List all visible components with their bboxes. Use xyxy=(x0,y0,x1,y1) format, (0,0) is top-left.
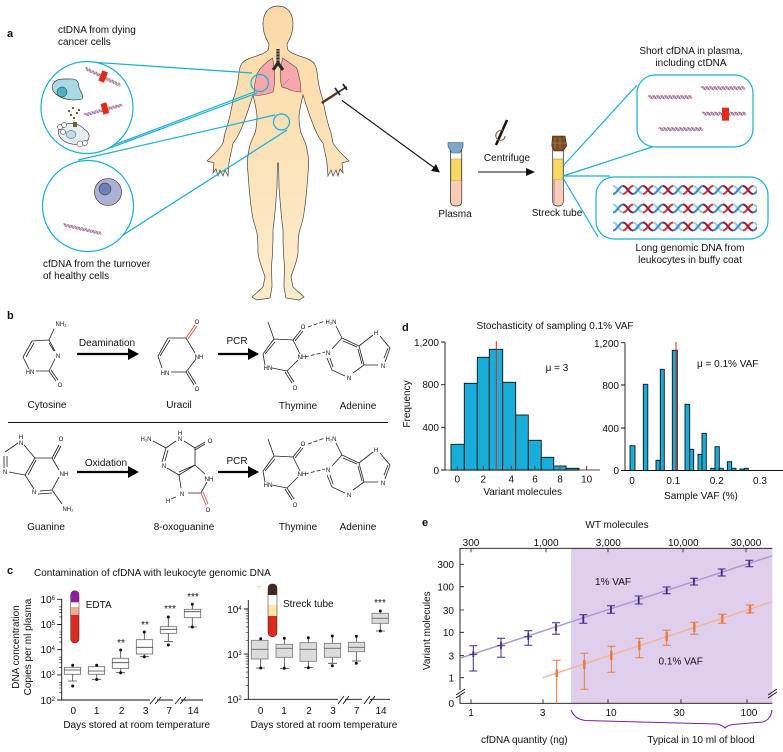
icon: Streck tube xyxy=(268,584,277,637)
top axis tick labels xyxy=(463,538,762,549)
thymine adenine pair bottom: O xyxy=(293,503,298,509)
icon: healthy nucleus xyxy=(99,183,111,195)
guanine structure: N xyxy=(32,490,36,496)
x-axis tick labels: 7 xyxy=(167,706,173,717)
top axis tick labels: 1,000 xyxy=(533,538,559,549)
axis labels: 1,200 xyxy=(594,339,619,350)
left axis tick labels: 300 xyxy=(437,560,454,571)
axis labels: 0.2 xyxy=(710,476,724,487)
8-oxoguanine structure: H xyxy=(178,431,182,437)
label 8-oxoguanine: 8-oxoguanine xyxy=(154,522,215,533)
bottom axis tick labels: 3 xyxy=(540,708,546,719)
left axis tick labels: 0 xyxy=(448,699,454,710)
8-oxoguanine structure xyxy=(140,431,213,514)
y-axis tick labels: 2 xyxy=(52,697,56,703)
significance stars: ** xyxy=(117,638,125,649)
icon: apoptotic blebs xyxy=(58,122,88,147)
top axis tick labels: 30,000 xyxy=(731,538,762,549)
left axis tick labels: 10 xyxy=(443,628,454,639)
annotation mu: μ = 3 xyxy=(546,363,569,374)
thymine adenine pair top: N xyxy=(347,376,351,382)
cytosine structure xyxy=(23,322,67,389)
y-axis subtitle: Copies per ml plasma xyxy=(23,598,34,695)
bottom axis tick labels: 1 xyxy=(468,708,474,719)
label guanine: Guanine xyxy=(27,522,65,533)
y-axis tick labels: 10 xyxy=(41,595,52,606)
axis labels: 10 xyxy=(581,474,593,486)
significance stars: *** xyxy=(164,604,176,615)
x-axis title: Variant molecules xyxy=(483,487,562,498)
box: short cfDNA xyxy=(637,75,753,147)
axis labels: 1,200 xyxy=(414,338,439,349)
thymine adenine pair top: N xyxy=(381,364,385,370)
caption long genomic DNA: leukocytes in buffy coat xyxy=(638,255,742,266)
x-axis tick labels: 7 xyxy=(354,706,360,717)
bottom axis tick labels: 10 xyxy=(605,708,617,719)
y-axis tick labels: 10 xyxy=(41,620,52,631)
8-oxoguanine structure: O xyxy=(206,508,211,514)
label deamination: Deamination xyxy=(79,338,135,349)
histogram: sample VAF xyxy=(594,339,783,502)
axis labels: 400 xyxy=(422,423,439,434)
label streck tube: Streck tube xyxy=(532,208,583,219)
panel label b: b xyxy=(7,310,14,322)
cytosine structure: NH₂ xyxy=(56,322,67,328)
panel label d: d xyxy=(402,322,409,334)
axis labels: 800 xyxy=(602,381,619,392)
y-axis tick labels: 10 xyxy=(41,696,52,707)
axis labels: 6 xyxy=(532,474,538,486)
y-axis tick labels: 10 xyxy=(227,650,238,661)
histogram: variant molecules xyxy=(402,338,600,498)
callout lines to boxes xyxy=(563,85,652,237)
lungs and trachea xyxy=(254,49,301,95)
panel d title: Stochasticity of sampling 0.1% VAF xyxy=(476,321,634,332)
label uracil: Uracil xyxy=(166,400,192,411)
y-axis title: DNA concentration xyxy=(11,605,22,689)
top axis tick labels: 10,000 xyxy=(668,538,699,549)
x-axis tick labels: 1 xyxy=(281,706,287,717)
axis labels: 0.1 xyxy=(666,476,681,487)
1% VAF fit line xyxy=(460,556,772,658)
axis labels: 0 xyxy=(455,474,461,486)
significance stars: *** xyxy=(187,592,199,603)
PCR arrow top xyxy=(218,348,259,360)
panel c: leukocyte contamination box plots xyxy=(7,517,777,746)
8-oxoguanine structure: N xyxy=(162,464,166,470)
thymine adenine pair bottom: N xyxy=(347,493,351,499)
icon: EDTA tube xyxy=(71,591,79,643)
1% VAF error bars xyxy=(469,560,753,671)
8-oxoguanine structure: N xyxy=(180,492,184,498)
x-axis tick labels: 0 xyxy=(258,706,264,717)
ctDNA fragment with mutation xyxy=(84,102,123,117)
panel label e: e xyxy=(422,517,428,529)
y-axis title: Frequency xyxy=(402,380,413,428)
human body xyxy=(207,6,349,300)
guanine structure xyxy=(3,435,74,513)
x-axis tick labels: 14 xyxy=(375,706,387,717)
icon: healthy cell xyxy=(94,178,122,206)
callout lines xyxy=(78,62,287,237)
arrow to plasma tube xyxy=(342,100,440,172)
axis labels: 800 xyxy=(422,380,439,391)
plot: variant molecules xyxy=(456,548,777,703)
short DNA fragments xyxy=(648,86,746,131)
thymine adenine pair bottom xyxy=(263,437,390,509)
left axis tick labels: 3 xyxy=(448,652,454,662)
label PCR bottom: PCR xyxy=(226,456,248,467)
caption short cfDNA: Short cfDNA in plasma, xyxy=(639,46,743,57)
icon: nucleus xyxy=(57,87,67,97)
x-axis tick labels: 3 xyxy=(330,706,336,717)
guanine structure: NH₂ xyxy=(62,507,74,513)
uracil structure: NH xyxy=(195,355,203,361)
axis labels: 8 xyxy=(557,474,563,486)
deamination arrow xyxy=(77,348,139,360)
x-axis tick labels xyxy=(258,706,387,717)
panel b: DNA damage chemistry xyxy=(3,310,390,533)
thymine adenine pair bottom: HN xyxy=(264,483,272,489)
gut callout ring xyxy=(274,114,290,130)
8-oxoguanine structure: O xyxy=(208,439,213,445)
thymine adenine pair top xyxy=(263,320,390,392)
uracil structure: HN xyxy=(161,371,169,377)
uracil structure xyxy=(158,320,203,393)
lung callout ring xyxy=(251,74,268,92)
cytosine structure: O xyxy=(58,383,63,389)
y-axis tick labels: 4 xyxy=(52,646,56,652)
plasma tube xyxy=(448,142,463,206)
y-axis tick labels: 5 xyxy=(52,621,56,627)
faint stray stars: ** xyxy=(257,586,262,592)
thymine adenine pair top: H xyxy=(374,331,378,337)
bottom axis tick labels: 100 xyxy=(741,708,758,719)
x-axis tick labels xyxy=(71,706,199,717)
thymine adenine pair bottom: H xyxy=(374,448,378,454)
panel d: stochasticity histograms xyxy=(402,321,783,502)
bottom axis tick labels: 30 xyxy=(674,708,685,719)
thymine adenine pair bottom: N xyxy=(381,481,385,487)
shaded typical range xyxy=(571,548,772,703)
0.1% VAF fit line xyxy=(543,602,772,678)
y-axis tick labels: 2 xyxy=(238,696,242,702)
top axis tick labels: 300 xyxy=(463,538,480,549)
label typical in blood: Typical in 10 ml of blood xyxy=(647,735,755,746)
centrifuge arrow xyxy=(478,168,535,176)
cytosine structure: N xyxy=(56,354,60,360)
significance stars: *** xyxy=(374,598,386,609)
x-axis title: Days stored at room temperature xyxy=(63,720,210,731)
axis labels: 0 xyxy=(613,466,619,477)
label thymine top: Thymine xyxy=(279,401,318,412)
caption ctDNA: ctDNA from dying xyxy=(58,25,136,36)
label oxidation: Oxidation xyxy=(85,458,127,469)
caption cfDNA: of healthy cells xyxy=(43,271,109,282)
guanine structure: O xyxy=(59,437,64,443)
y-axis tick labels: 10 xyxy=(41,645,52,656)
ctDNA fragment with mutation xyxy=(84,67,121,87)
thymine adenine pair bottom: O xyxy=(301,442,306,448)
x-axis tick labels: 2 xyxy=(306,706,312,717)
y-axis tick labels xyxy=(227,605,242,706)
cfDNA fragment xyxy=(63,223,102,235)
label cfDNA quantity: cfDNA quantity (ng) xyxy=(481,735,568,746)
top axis title: WT molecules xyxy=(585,520,649,531)
icon: cancer cell xyxy=(52,79,83,100)
8-oxoguanine structure: NH xyxy=(205,477,213,483)
zoom circle: dying cancer cells xyxy=(41,62,133,154)
y-axis tick labels: 10 xyxy=(41,670,52,681)
thymine adenine pair top: O xyxy=(293,386,298,392)
label adenine bottom: Adenine xyxy=(340,522,377,533)
icon: apoptotic nucleus xyxy=(66,130,76,138)
caption long genomic DNA: Long genomic DNA from xyxy=(636,243,744,254)
purple brace xyxy=(571,710,772,728)
zoom circle: healthy cells xyxy=(42,160,134,252)
label Streck tube: Streck tube xyxy=(283,599,334,610)
axis labels: 4 xyxy=(509,474,515,486)
uracil structure: O xyxy=(195,320,200,326)
axis labels: 400 xyxy=(602,424,619,435)
x-axis tick labels: 3 xyxy=(143,706,149,717)
x-axis tick labels: 1 xyxy=(94,706,100,717)
significance stars: ** xyxy=(141,620,149,631)
panel e: variant molecules vs cfDNA quantity xyxy=(422,517,777,746)
y-axis tick labels: 6 xyxy=(52,596,56,602)
0.1% VAF error bars xyxy=(553,605,754,703)
thymine adenine pair top: NH xyxy=(298,355,306,361)
y-axis tick labels: 10 xyxy=(227,605,238,616)
icon: syringe xyxy=(322,84,347,103)
guanine structure: H xyxy=(19,435,23,441)
thymine adenine pair bottom: N xyxy=(326,468,330,474)
x-axis tick labels: 0 xyxy=(71,706,77,717)
label thymine bottom: Thymine xyxy=(279,522,318,533)
y-axis tick labels: 4 xyxy=(238,606,242,612)
axis labels: 0 xyxy=(629,476,635,487)
cytosine structure: HN xyxy=(26,370,34,376)
thymine adenine pair bottom: H₂N xyxy=(326,437,336,443)
axis labels: 0 xyxy=(433,466,439,477)
label plasma: Plasma xyxy=(438,209,472,220)
caption cfDNA: cfDNA from the turnover xyxy=(43,259,150,270)
box plot: EDTA xyxy=(41,591,210,731)
uracil structure: O xyxy=(195,387,200,393)
panel c title: Contamination of cfDNA with leukocyte genomic DNA xyxy=(34,568,271,579)
oxidation arrow xyxy=(77,466,139,478)
axis labels: 0.3 xyxy=(753,476,767,487)
x-axis title: Sample VAF (%) xyxy=(664,491,738,502)
caption short cfDNA: including ctDNA xyxy=(655,58,727,69)
left axis tick labels: 100 xyxy=(437,582,454,594)
y-axis tick labels: 3 xyxy=(52,671,56,677)
left axis tick labels: 30 xyxy=(443,606,454,617)
label adenine top: Adenine xyxy=(340,401,377,412)
box plot: Streck tube xyxy=(227,584,398,731)
x-axis tick labels: 14 xyxy=(188,706,199,717)
axis labels xyxy=(594,339,767,487)
y-axis title: Variant molecules xyxy=(422,591,433,670)
panel label a: a xyxy=(7,28,14,40)
x-axis tick labels: 2 xyxy=(119,706,125,717)
PCR arrow bottom xyxy=(218,466,259,478)
y-axis tick labels: 3 xyxy=(238,651,242,657)
label cytosine: Cytosine xyxy=(28,400,67,411)
icon: centrifuge xyxy=(496,120,507,145)
icon: apoptotic cell xyxy=(58,123,89,144)
y-axis tick labels: 10 xyxy=(227,695,238,706)
8-oxoguanine structure: N xyxy=(178,437,182,443)
left axis tick labels: 1 xyxy=(448,674,454,684)
thymine adenine pair top: HN xyxy=(264,366,272,372)
bottom axis tick labels xyxy=(468,708,758,719)
label PCR top: PCR xyxy=(226,336,248,347)
annotation mu VAF: μ = 0.1% VAF xyxy=(697,359,758,370)
thymine adenine pair top: H₂N xyxy=(326,320,336,326)
guanine structure: NH xyxy=(60,472,68,478)
label 0.1% VAF: 0.1% VAF xyxy=(659,656,703,668)
axis labels xyxy=(414,338,593,486)
box: long genomic DNA xyxy=(596,177,768,239)
x-axis title: Days stored at room temperature xyxy=(251,720,398,731)
label 1% VAF: 1% VAF xyxy=(595,577,631,588)
significance stars xyxy=(117,592,199,649)
streck tube xyxy=(552,136,567,206)
label EDTA: EDTA xyxy=(86,600,112,611)
icon: released fragments xyxy=(68,107,80,127)
y-axis tick labels xyxy=(41,595,56,707)
long DNA helices xyxy=(613,184,757,232)
panel label c: c xyxy=(7,565,13,577)
guanine structure: N xyxy=(19,441,23,447)
caption ctDNA: cancer cells xyxy=(58,37,111,48)
8-oxoguanine structure: H₂N xyxy=(140,437,152,443)
8-oxoguanine structure: H xyxy=(166,499,170,505)
label centrifuge: Centrifuge xyxy=(484,153,531,164)
axis labels: 2 xyxy=(481,474,487,486)
top axis tick labels: 3,000 xyxy=(596,538,621,549)
thymine adenine pair top: O xyxy=(301,325,306,331)
thymine adenine pair top: N xyxy=(326,351,330,357)
left axis tick labels xyxy=(437,560,454,710)
panel a: cfDNA origin and blood collection xyxy=(7,6,768,300)
guanine structure: N xyxy=(3,470,7,476)
thymine adenine pair bottom: NH xyxy=(298,472,306,478)
